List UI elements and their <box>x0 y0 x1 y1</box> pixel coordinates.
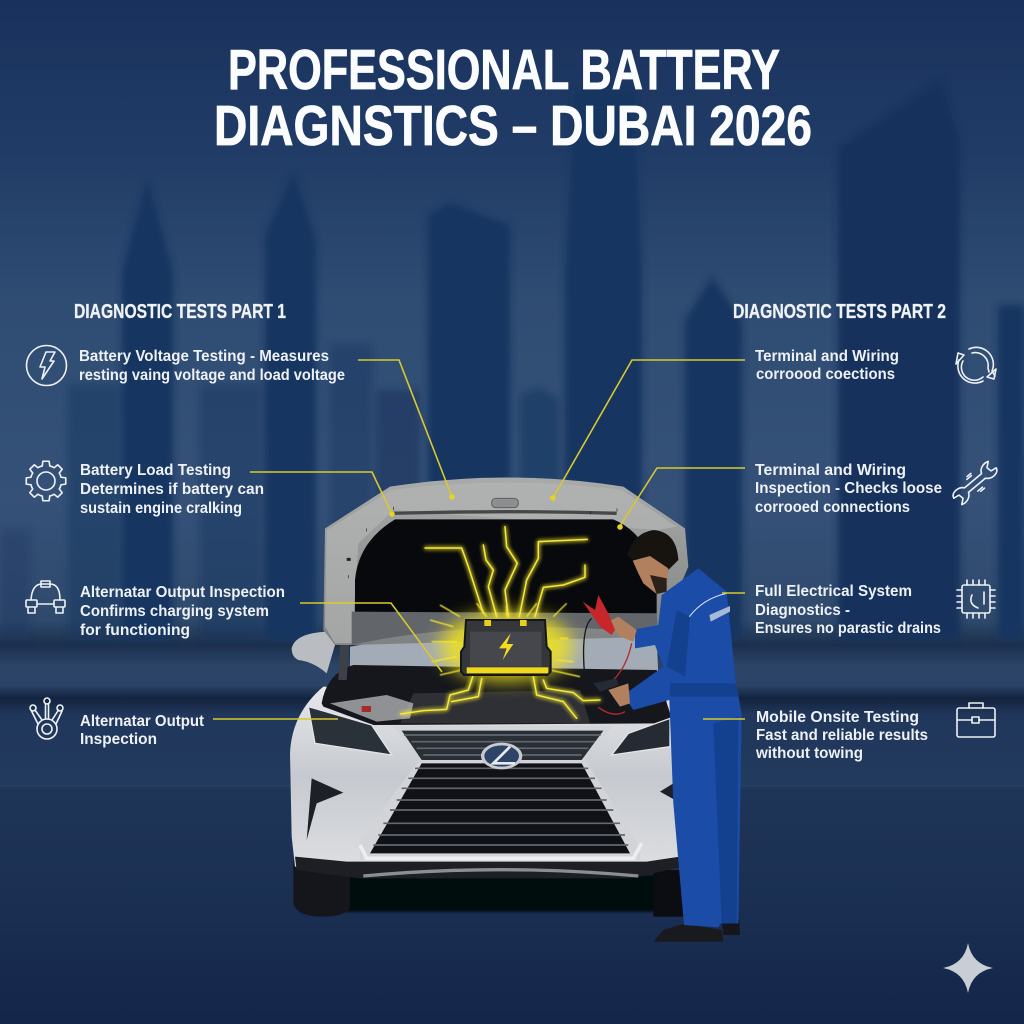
car illustration <box>290 477 688 917</box>
text: mobile onsite testing: Mobile Onsite Testing <box>756 709 919 726</box>
text: full electrical system <box>755 583 941 637</box>
icon: car <box>26 581 65 613</box>
text: terminal and wiring inspection: Terminal and Wiring <box>755 462 906 479</box>
road marking line <box>0 785 1024 786</box>
shoulder stripe <box>689 593 727 617</box>
car body <box>290 687 680 867</box>
text: terminal and wiring inspection: corrooed connections <box>755 499 910 516</box>
windshield <box>350 631 658 677</box>
text: battery load testing: Determines if battery can <box>80 481 264 498</box>
ground shadow under car <box>300 875 688 912</box>
text: alternator output: Inspection <box>80 731 157 748</box>
mechanic <box>583 530 742 942</box>
text: mobile onsite testing: Fast and reliable results <box>756 727 928 744</box>
coverall body <box>627 568 742 927</box>
text: alternator output inspection: Alternatar Output Inspection <box>80 584 285 601</box>
right boot <box>653 923 723 942</box>
panel: diagnostic tests part 1 <box>26 301 345 748</box>
title: PROFESSIONAL BATTERY <box>228 38 780 102</box>
text: mobile onsite testing <box>755 709 928 762</box>
hair <box>627 530 678 570</box>
text: terminal and wiring inspection <box>755 462 942 516</box>
tester <box>593 678 618 692</box>
icon: wrench <box>949 459 1001 507</box>
panel: diagnostic tests part 2 <box>733 301 1001 762</box>
icon: probe fork <box>30 698 63 739</box>
text: full electrical system: Full Electrical System <box>755 583 912 600</box>
text: alternator output inspection: Confirms charging system <box>80 603 269 620</box>
text: terminal and wiring <box>755 348 899 383</box>
text: mobile onsite testing: without towing <box>755 745 863 762</box>
front grille surround <box>360 726 640 860</box>
hood latch <box>492 498 518 508</box>
text: battery load testing: sustain engine cralking <box>80 500 242 517</box>
face <box>633 556 668 594</box>
text: alternator output: Alternatar Output <box>80 713 204 730</box>
open hood <box>323 477 688 645</box>
glow rays <box>430 603 580 677</box>
left boot <box>722 920 740 935</box>
icon: gear <box>26 461 66 501</box>
heading: part 2: DIAGNOSTIC TESTS PART 2 <box>733 301 946 323</box>
fog light housings <box>307 778 343 840</box>
lower bumper <box>295 857 683 878</box>
icon: refresh arrows <box>956 347 996 383</box>
hood strut <box>338 630 350 680</box>
title <box>214 38 812 158</box>
text: terminal and wiring: corroood coections <box>756 366 895 383</box>
left wheel <box>293 860 350 917</box>
right wheel <box>653 870 687 917</box>
battery glow <box>440 612 573 682</box>
callout lines <box>213 360 745 719</box>
battery <box>461 620 551 675</box>
lower grille <box>370 763 630 853</box>
text: alternator output inspection: for functioning <box>80 622 190 639</box>
logo patch <box>709 606 730 622</box>
battery lightning lines <box>401 527 600 718</box>
engine parts <box>330 695 413 722</box>
icon: bolt in circle <box>26 346 66 386</box>
beard <box>650 575 667 594</box>
red engine detail <box>362 706 371 712</box>
text: terminal and wiring inspection: Inspection - Checks loose <box>755 480 942 497</box>
red clamp <box>583 595 615 635</box>
text: battery load testing: Battery Load Testing <box>80 462 231 479</box>
text: battery voltage testing <box>79 348 345 384</box>
title: DIAGNSTICS – DUBAI 2026 <box>214 94 812 158</box>
upper grille <box>402 731 603 760</box>
coverall shading <box>667 610 738 923</box>
grille slats <box>373 735 628 845</box>
text: battery voltage testing: resting vaing voltage and load voltage <box>79 367 345 384</box>
battery bolt icon <box>499 633 513 660</box>
hand holding tester <box>608 683 630 707</box>
engine bay <box>322 665 670 725</box>
Lexus badge <box>481 743 522 769</box>
icon: chip <box>957 580 995 618</box>
hood lower strip <box>352 612 658 645</box>
hand holding clamp <box>608 617 637 642</box>
text: alternator output <box>80 713 204 748</box>
icon: briefcase <box>957 703 995 737</box>
text: battery voltage testing: Battery Voltage Testing - Measures <box>79 348 329 365</box>
heading: part 1: DIAGNOSTIC TESTS PART 1 <box>74 301 286 323</box>
text: alternator output inspection <box>80 584 285 639</box>
clamp cables <box>598 643 632 714</box>
headlights <box>308 707 392 755</box>
text: full electrical system: Diagnostics - <box>755 602 850 619</box>
text: full electrical system: Ensures no parastic drains <box>755 620 941 637</box>
icon: sparkle watermark <box>943 943 993 993</box>
text: terminal and wiring: Terminal and Wiring <box>755 348 899 365</box>
text: battery load testing <box>80 462 264 517</box>
hood inner liner <box>355 519 657 613</box>
left door mirror <box>292 632 335 673</box>
